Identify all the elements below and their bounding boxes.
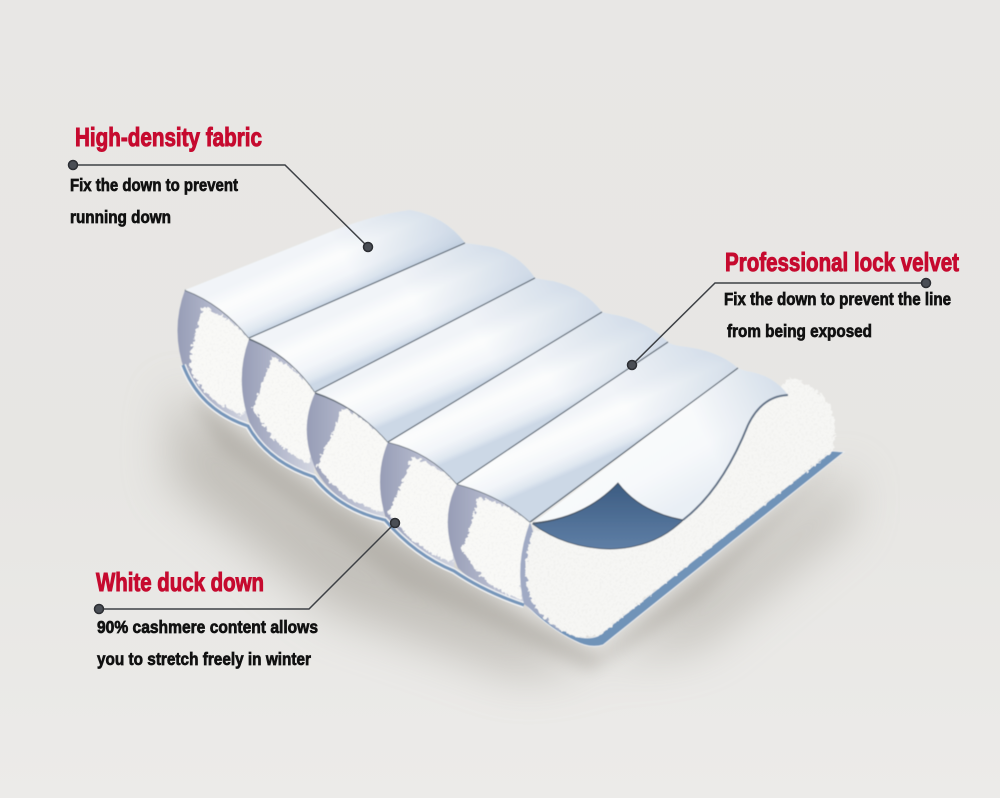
top shell tube 3 [315,278,602,442]
down section 4 [380,442,459,570]
cast shadow under the padding [170,390,850,675]
down section 5 [448,484,530,605]
heading: White duck down [96,567,264,597]
description: Fix the down to prevent [70,175,238,195]
top shell tube 4 [388,312,668,484]
marker dots [628,278,930,370]
description: you to stretch freely in winter [97,649,311,669]
callout: white duck down [94,518,400,669]
exposed down at the cut-away end [520,378,835,637]
heading: High-density fabric [75,122,262,152]
description [97,617,318,669]
blue shell band [183,365,524,605]
down section 3 [307,393,389,518]
top shell tube 1 [185,210,465,338]
description: from being exposed [727,321,872,341]
leader line [99,523,395,609]
description: 90% cashmere content allows [97,617,318,637]
leader line [73,165,368,247]
quilting seams [249,243,738,522]
bottom shell plate [524,451,844,646]
lining revealed beneath the peeled shell [533,483,683,549]
description: running down [70,207,171,227]
top shell tube 6, peeled back [533,368,788,523]
marker dots [68,160,372,252]
description [70,175,238,227]
top shell tube 5 [457,342,738,522]
scalloped bottom edge of shell [183,365,524,605]
down section 2 [242,339,316,476]
description: Fix the down to prevent the line [724,289,951,309]
description [724,289,951,341]
down section 1 [178,290,250,425]
top shell tube 2 [249,243,535,392]
callout: high-density fabric [68,122,372,252]
illustration: quilted down padding cross-section [178,210,844,646]
marker dots [94,518,400,614]
leader line [632,283,926,365]
callout: professional lock velvet [628,247,959,370]
